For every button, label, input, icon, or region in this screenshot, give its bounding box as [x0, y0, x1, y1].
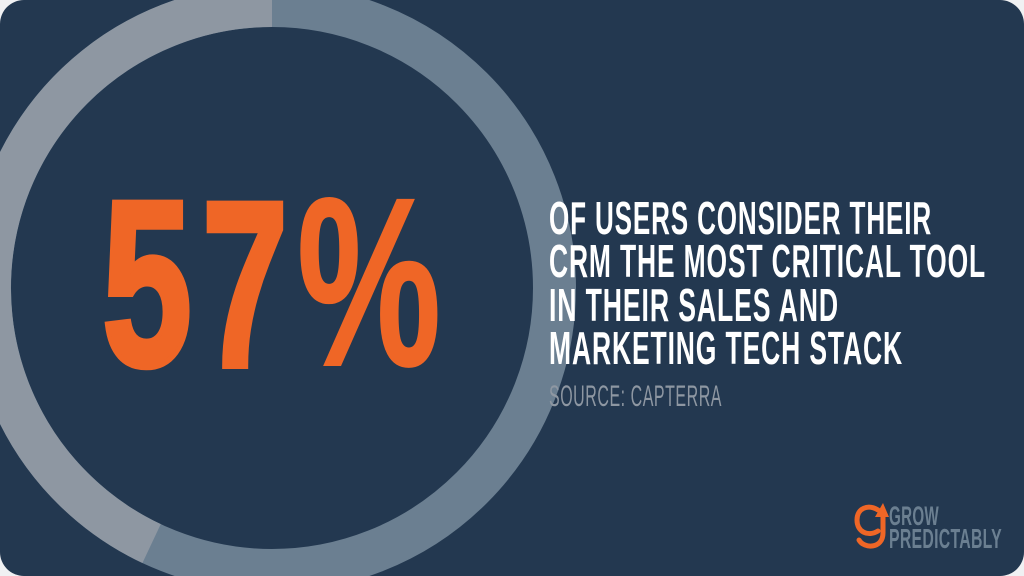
logo wordmark: GROW [889, 501, 939, 531]
logo: Grow Predictably [857, 501, 1002, 554]
logo wordmark [889, 501, 1002, 554]
headline text [549, 192, 986, 374]
big number: 57% [102, 148, 441, 417]
icon: orange g with up arrow [857, 503, 889, 546]
big number: 57%: 7 [202, 153, 288, 417]
big number: 57%: 5 [102, 152, 192, 416]
chart: 57 percent donut ring [0, 5, 554, 570]
source note: SOURCE: CAPTERRA [549, 380, 722, 413]
big number: 57%: % [297, 148, 441, 416]
